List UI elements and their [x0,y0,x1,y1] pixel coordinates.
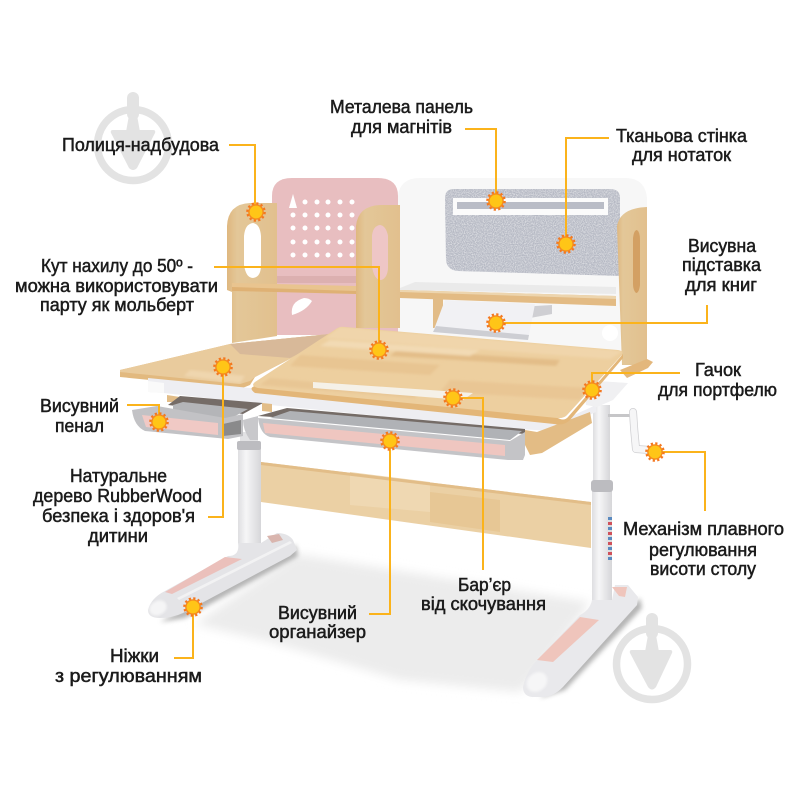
callout: pull-out book stand: Висувна [688,236,757,256]
pull-out book stand [433,300,552,340]
callout: adjustable legs: з регулюванням [55,666,202,686]
callout: anti-slip barrier: від скочування [421,594,546,614]
callout: bag hook: Гачок [695,360,741,380]
watermark: top left [98,92,168,180]
left desktop [120,333,340,389]
callout: tilt angle: можна використовувати [15,276,218,296]
callout: height adjustment mechanism: регулювання [649,540,757,560]
callout: natural wood: дерево RubberWood [33,486,202,506]
callout: height adjustment mechanism: висоти столу [650,559,756,579]
main organizer drawer [243,408,525,460]
callout: pull-out organizer [269,432,399,642]
right shelf and support [400,290,616,328]
callout: height adjustment mechanism [623,443,784,579]
callout: bag hook: для портфелю [658,380,777,400]
callout: fabric wall for notes [557,126,748,253]
left leg [147,432,298,622]
callout: metal magnet panel: для магнітів [351,117,452,137]
left pencil drawer [132,395,272,439]
crank handle [608,412,650,450]
middle upright [356,205,400,328]
callout: pencil drawer: пенал [55,416,104,436]
callout: metal magnet panel: Металева панель [330,97,473,117]
watermark: bottom right [616,613,688,700]
callout: anti-slip barrier [421,389,546,614]
callout: metal magnet panel [330,97,505,210]
callout: tilt angle: парту як мольберт [40,295,194,315]
crossbar: wood [261,462,591,548]
white apron under desktop [148,378,628,431]
tilting desktop [252,327,623,424]
callout: adjustable legs [55,598,202,686]
white note board with felt [398,178,647,350]
callout: pencil drawer: Висувний [40,396,119,416]
callout: fabric wall for notes: Тканьова стінка [616,126,748,146]
callout: shelf add-on [62,135,265,221]
callout: pull-out book stand: для книг [685,275,757,295]
callout: natural wood: безпека і здоров'я [42,506,195,526]
callout: pull-out organizer: Висувний [278,603,357,623]
callout: height adjustment mechanism: Механізм плавного [623,519,784,539]
callout: anti-slip barrier: Бар’єр [458,575,511,595]
right leg [523,405,642,698]
callout: tilt angle [15,256,388,359]
callout: pull-out book stand: підставка [682,255,762,275]
left upright with shelf [227,203,356,343]
callout: adjustable legs: Ніжки [110,646,159,666]
callout: tilt angle: Кут нахилу до 50º - [41,256,193,276]
floor shadow [195,554,590,692]
right upright with base [617,207,653,378]
callout: natural wood: дитини [88,526,148,546]
callout: fabric wall for notes: для нотаток [632,145,731,165]
callout: pencil drawer [40,396,168,436]
desk illustration [120,178,653,698]
callout: shelf add-on: Полиця-надбудова [62,135,220,155]
wooden bracket under top [525,412,592,455]
callout: pull-out organizer: органайзер [269,622,366,642]
callout: bag hook [583,360,777,400]
callout: pull-out book stand [487,236,762,332]
callout: natural wood: Натуральне [70,466,167,486]
pink magnet panel [272,178,398,335]
callout: natural wood [33,358,232,546]
